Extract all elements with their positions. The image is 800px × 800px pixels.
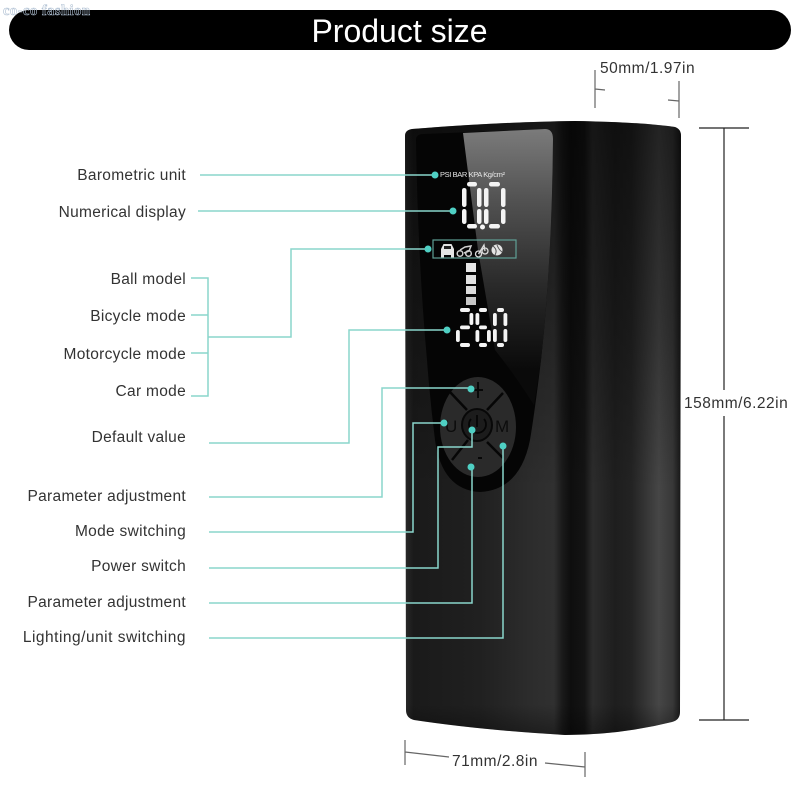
watermark: co-co fashion: [3, 3, 90, 19]
icon: ball: [492, 244, 502, 256]
M label: M: [495, 417, 509, 436]
label: car mode: Car mode: [116, 383, 186, 400]
callout lines: [191, 175, 503, 638]
label: power switch: Power switch: [91, 558, 186, 575]
label: parameter adjustment: Parameter adjustment: [28, 488, 186, 505]
label: parameter adjustment 2: Parameter adjustment: [28, 594, 186, 611]
label: lighting/unit switching: Lighting/unit switching: [23, 629, 186, 646]
progress bars: [466, 263, 476, 305]
button pad: [440, 377, 516, 477]
mode icons: [441, 244, 502, 258]
title bar: [9, 10, 791, 50]
device body: [405, 121, 681, 735]
icon: bicycle: [476, 245, 488, 257]
dimension: height: 158mm/6.22in: [684, 395, 788, 412]
labels: [23, 167, 186, 646]
label: ball model: Ball model: [111, 271, 186, 288]
icon: car: [441, 244, 454, 258]
dimension: bottom width: [405, 740, 585, 777]
label: numerical display: Numerical display: [59, 204, 186, 221]
barometric unit text: PSI BAR KPA Kg/cm²: [440, 170, 506, 179]
minus: [478, 457, 482, 459]
dimension: width top: 50mm/1.97in: [600, 60, 695, 77]
U label: U: [445, 417, 457, 436]
mode box: [433, 240, 516, 258]
callout dots: [424, 172, 506, 470]
icon: power: [469, 415, 486, 433]
icon: motorcycle: [457, 246, 471, 256]
numerical display 260: [456, 308, 507, 347]
dimension: width top: [595, 60, 695, 118]
label: motorcycle mode: Motorcycle mode: [63, 346, 186, 363]
title: Product size: [311, 13, 488, 49]
dimension: bottom width: 71mm/2.8in: [452, 753, 538, 770]
dimension: height: [684, 128, 788, 720]
plus: [473, 382, 483, 398]
display panel: [416, 129, 553, 492]
label: barometric unit: Barometric unit: [77, 167, 186, 184]
numerical display 0.0: [462, 182, 506, 230]
label: mode switching: Mode switching: [75, 523, 186, 540]
screen glare: [463, 129, 553, 405]
label: bicycle mode: Bicycle mode: [90, 308, 186, 325]
label: default value: Default value: [92, 429, 186, 446]
